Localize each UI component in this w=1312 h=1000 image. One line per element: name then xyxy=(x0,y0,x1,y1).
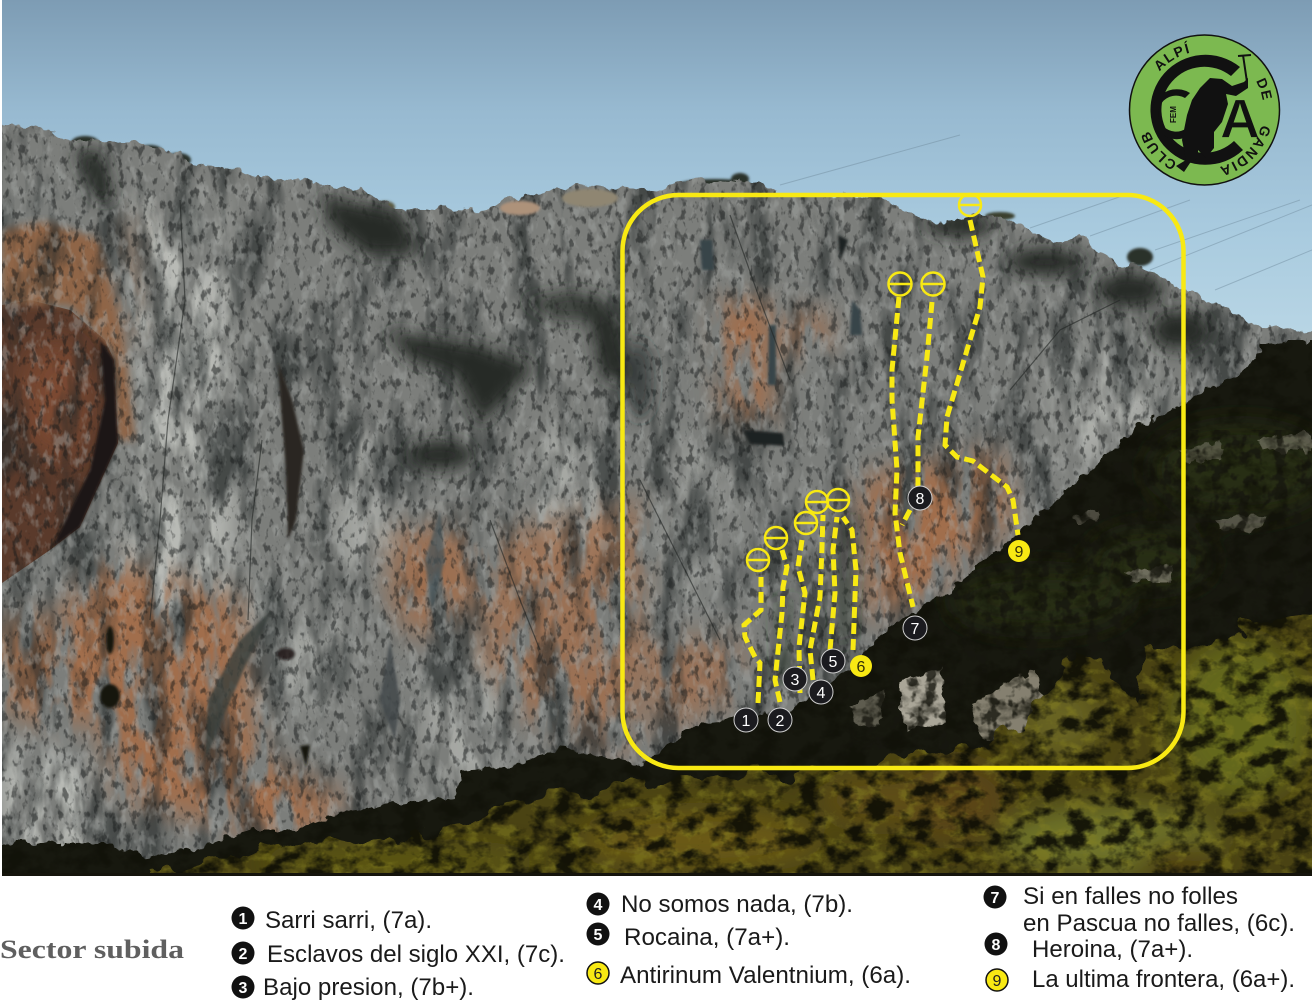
legend item 2: 2 xyxy=(239,946,248,963)
summit stones xyxy=(500,189,618,215)
word GANDIA: GANDIA xyxy=(1220,126,1270,175)
badge 3 xyxy=(783,667,807,691)
logo ice axe xyxy=(1238,55,1251,82)
badge 5: 5 xyxy=(829,654,838,671)
route 8 branch xyxy=(902,510,910,525)
badge 4 xyxy=(809,680,833,704)
route 9 line xyxy=(945,220,1018,535)
legend item 9: 9 xyxy=(993,973,1002,990)
badge 6: 6 xyxy=(857,659,866,676)
badge 2 xyxy=(768,708,792,732)
legend item 2: Esclavos del siglo XXI, (7c). xyxy=(267,941,565,968)
sector frame xyxy=(622,195,1184,768)
route 8 line xyxy=(918,302,932,487)
route number badges xyxy=(734,486,1030,732)
legend item 7: Si en falles no folles xyxy=(1023,883,1238,910)
bottom edge of photo xyxy=(2,873,1312,876)
badge 2: 2 xyxy=(776,713,785,730)
cave shadow xyxy=(52,340,118,548)
sky xyxy=(2,0,1312,360)
logo: Club Alpi de Gandia xyxy=(1128,34,1280,186)
legend item 7 xyxy=(984,883,1295,937)
vegetation xyxy=(0,340,1312,880)
badge 7 xyxy=(903,616,927,640)
lit trees xyxy=(150,614,1312,873)
route 5 line xyxy=(830,517,837,650)
route anchors xyxy=(747,194,981,571)
badge 9 xyxy=(1008,540,1030,562)
route 3 line xyxy=(798,540,805,693)
route 2 line xyxy=(775,550,787,702)
badge 4: 4 xyxy=(817,685,826,702)
badge 3: 3 xyxy=(791,672,800,689)
badge 1: 1 xyxy=(742,713,751,730)
legend item 8: Heroina, (7a+). xyxy=(1032,936,1193,963)
word CLUB: CLUB xyxy=(1142,132,1176,169)
shrubs on the ridge xyxy=(71,136,1153,266)
route 6 line xyxy=(843,517,856,650)
logo small C xyxy=(1152,89,1192,139)
legend item 6: Antirinum Valentnium, (6a). xyxy=(620,962,911,989)
logo climber xyxy=(1176,78,1248,172)
legend item 4: No somos nada, (7b). xyxy=(621,891,853,918)
gullies and dark cracks xyxy=(100,235,862,768)
badge 5 xyxy=(821,649,845,673)
anchor route 8 xyxy=(922,272,945,296)
anchor route 7 xyxy=(888,272,912,296)
legend item 5: 5 xyxy=(594,927,603,944)
anchor route 3 xyxy=(795,512,817,534)
route 4 line xyxy=(810,515,823,680)
legend item 1: 1 xyxy=(239,911,248,928)
logo FEM mark: FEM xyxy=(1169,106,1178,123)
legend item 5: Rocaina, (7a+). xyxy=(624,924,790,951)
legend xyxy=(232,883,1295,1000)
word ALPÍ: ALPÍ xyxy=(1156,40,1190,72)
anchor route 4 xyxy=(806,491,828,513)
anchor route 1 xyxy=(747,549,769,571)
pale rock zones xyxy=(2,186,1164,846)
legend item 8: 8 xyxy=(992,937,1001,954)
route 7 line xyxy=(892,297,913,607)
anchor route 5 xyxy=(827,489,849,511)
pale boulders xyxy=(850,430,1312,740)
anchor route 2 xyxy=(765,527,787,549)
power lines xyxy=(780,135,1312,290)
cliff face xyxy=(0,100,1312,880)
legend item 4: 4 xyxy=(594,897,603,914)
rust streaks xyxy=(2,219,1020,838)
rock texture xyxy=(0,100,1312,880)
anchor route 9 xyxy=(959,194,981,216)
badge 7: 7 xyxy=(911,621,920,638)
legend item 8 xyxy=(984,932,1193,963)
badge 1 xyxy=(734,708,758,732)
legend item 6: 6 xyxy=(594,966,603,983)
logo ring xyxy=(1150,55,1243,165)
legend item 9: La ultima frontera, (6a+). xyxy=(1032,966,1295,993)
badge 9: 9 xyxy=(1015,544,1024,561)
logo arc text xyxy=(1142,40,1272,175)
badge 6 xyxy=(850,655,872,677)
badge 8 xyxy=(908,486,932,510)
climbing routes xyxy=(744,220,1018,703)
badge 8: 8 xyxy=(916,491,925,508)
legend item 7: 7 xyxy=(991,890,1000,907)
logo letter A: A xyxy=(1220,87,1260,150)
word DE: DE xyxy=(1256,78,1272,100)
sector title: Sector subida xyxy=(0,935,184,964)
cave xyxy=(2,300,118,583)
vegetation patches and shadows xyxy=(75,150,1210,680)
legend item 3: 3 xyxy=(239,980,248,997)
legend item 7: en Pascua no falles, (6c). xyxy=(1023,910,1295,937)
route 1 line xyxy=(744,577,761,703)
legend item 1: Sarri sarri, (7a). xyxy=(265,907,432,934)
